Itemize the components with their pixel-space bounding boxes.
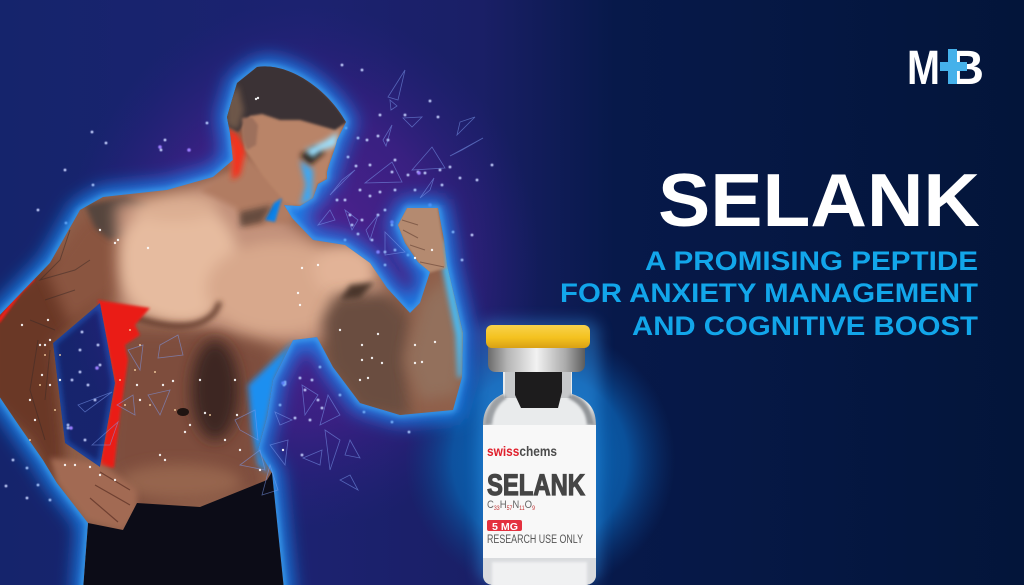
subtitle: A PROMISING PEPTIDE (645, 246, 978, 276)
chemical formula: N (512, 499, 519, 511)
blue rim light on torso (248, 340, 295, 474)
vial of Selank (480, 325, 600, 585)
M+B logo: B (950, 42, 984, 95)
vial stopper (515, 372, 562, 408)
M+B logo (907, 42, 984, 95)
glow around the man (0, 66, 463, 585)
man figure (0, 66, 463, 585)
red rim light on torso (98, 300, 150, 468)
chemical formula: 11 (519, 506, 525, 512)
chemical formula: 57 (507, 506, 513, 512)
abdomen shading (108, 302, 272, 510)
vial product name: SELANK (487, 469, 585, 502)
particles behind the man (6, 65, 492, 500)
research use only: RESEARCH USE ONLY (487, 534, 583, 546)
vial glass body (480, 370, 600, 585)
subtitle: AND COGNITIVE BOOST (632, 311, 979, 341)
chemical formula: O (525, 499, 532, 511)
title: SELANK (658, 158, 980, 242)
chemical formula: C (487, 499, 495, 511)
torso lit pectorals (115, 178, 390, 345)
dose badge (487, 520, 522, 533)
dose badge: 5 MG (492, 521, 518, 533)
vial metal collar (488, 346, 585, 372)
hand on hip (50, 458, 137, 530)
vial glow edge (478, 320, 600, 585)
chemical formula: 33 (494, 506, 500, 512)
chemical formula: 9 (532, 506, 536, 512)
fist (396, 206, 446, 274)
chemical formula: H (500, 499, 507, 511)
vial yellow cap (486, 325, 590, 348)
black shorts (83, 472, 286, 585)
raised arm (322, 240, 466, 420)
subtitle (560, 246, 979, 341)
subtitle: FOR ANXIETY MANAGEMENT (560, 278, 979, 308)
M+B logo: M (907, 42, 940, 95)
brand: swisschems (487, 444, 557, 459)
neck and head (200, 64, 347, 228)
left arm shading (0, 197, 150, 500)
particles and triangles over the man (22, 70, 483, 495)
